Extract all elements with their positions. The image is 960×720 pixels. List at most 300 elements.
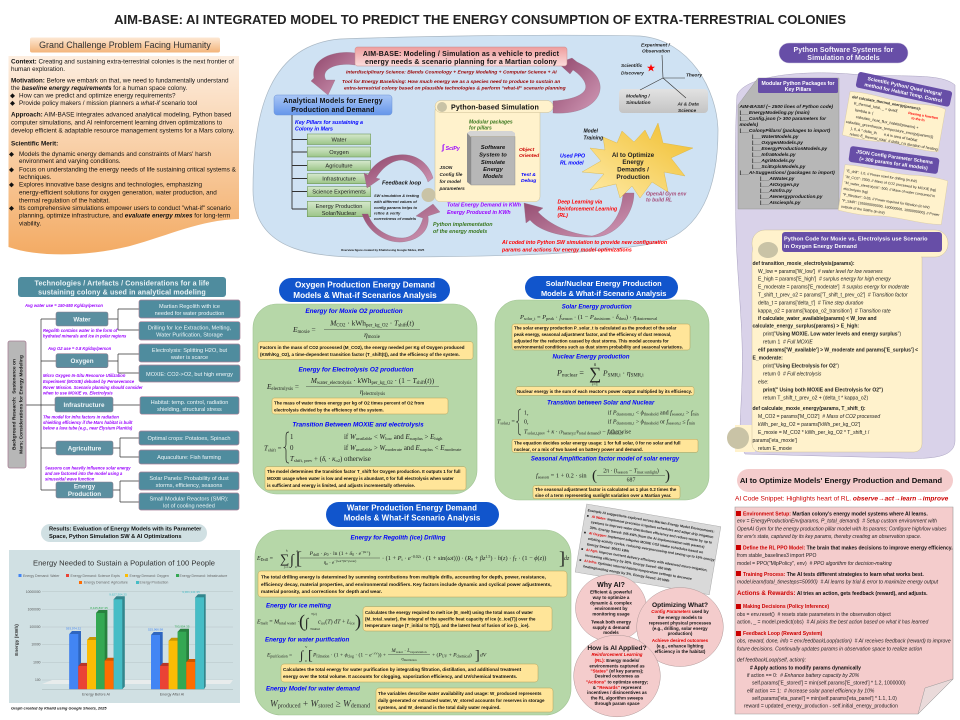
- formula: drilling: k: [286, 548, 288, 552]
- circle: optimizing what: (e.g., enhance lighting: [657, 644, 704, 648]
- file tree: |___InfraModels.py: [752, 152, 796, 158]
- chart legend: Energy Demand: Science Expts: [70, 574, 120, 578]
- formula: seasonal: fseason = 1 + 0.2 · sin: [536, 472, 587, 480]
- label: openai gym: OpenAI Gym env: [646, 192, 688, 198]
- circle: how is AI applied: "Actions" to optimize energy;: [586, 679, 649, 684]
- note: AI suggestions gray card: 30%. Energy Saved: 245 kWh (from the AI implementation with params): [589, 526, 705, 549]
- circle: optimizing what: Config Parameters used by: [651, 609, 709, 614]
- text block: grand challenge body: energy-efficient solutions for oxygen generation, water production, and: [19, 190, 217, 197]
- formula: melt: ∫: [304, 615, 310, 631]
- formula: drilling: j=1: [283, 565, 289, 569]
- node: energy production: [56, 482, 113, 498]
- formula: drilling: · (1 + Pt · e−0.02t · (1 + sin(ωt))) · (R0 + βz1.5) · h(z) · fT · (1 − ϕ(z)): [382, 555, 546, 562]
- numbered code steps: obs, reward, done, info = env.feedbackLoop(action) # AI receives feedback (reward) to improve: [737, 639, 951, 645]
- node: energy production: Energy: [74, 484, 96, 490]
- text block: grand challenge body: ◆: [9, 151, 14, 158]
- label: scipy: ∫ SciPy: [441, 143, 461, 152]
- bar chart: energy needed: [9, 550, 240, 703]
- note: AI suggestions gray card: AI Agri: Improve nutrient delivery efficiency with advanced micro-irrigation,: [586, 548, 708, 572]
- circle: optimizing what: efficiency in the habitat): [655, 649, 706, 654]
- text block: grand challenge body: Focus on understanding the energy needs of life sustaining critical systems &: [19, 167, 237, 174]
- pillar: oxygen: Oxygen: [329, 150, 349, 156]
- code listing: else:: [758, 380, 769, 386]
- node: agriculture: [56, 441, 113, 455]
- formula: seasonal: 2π · (tseason − Tmax sunlight): [603, 468, 659, 475]
- science triangle diagram: Experiment /: [641, 42, 670, 48]
- pillar: agriculture: Agriculture: [325, 164, 353, 170]
- note: AI suggestions gray card: systems to improve water distribution efficiency and reduce waste by up to: [590, 520, 712, 545]
- text block: grand challenge body: Context: Creating and sustaining extra-terrestrial colonies is the next frontier of: [11, 59, 234, 66]
- heading pill: python software: Python Software Systems for: [794, 47, 894, 54]
- title: AIM-BASE: AI INTEGRATED MODEL TO PREDICT THE ENERGY CONSUMPTION OF EXTRA-TERRESTRIAL COLONIES: [114, 12, 846, 27]
- note: seasons: sinusoidal wave function: [45, 476, 95, 482]
- root: background research: Background Research: Sustenance on: [12, 359, 18, 450]
- icon: red star: [647, 64, 655, 71]
- chart legend: Energy Demand: Oxygen: [130, 574, 169, 578]
- note: AI suggestions gray card: ■: [581, 547, 584, 551]
- numbered code steps: Training Process: The AI tests different strategies to learn what works best.: [743, 572, 924, 578]
- label: used PPO: [560, 154, 585, 166]
- title: purification: Energy for water purification: [265, 636, 349, 644]
- note: json config: outputs of the SMRs (in kW): [841, 204, 885, 215]
- leaf: aquaculture: Aquaculture: Fish farming: [157, 455, 221, 461]
- science triangle diagram: Scientific: [621, 63, 643, 69]
- label: test and debug: Debug: [521, 178, 536, 184]
- code listing: E_moderate:: [752, 356, 783, 362]
- circle: how is AI applied: environments captured as: [589, 663, 645, 668]
- panel: solar nuclear: [495, 276, 709, 500]
- pillar: science experiments: Science Experiments: [312, 190, 366, 196]
- panel: central overview blob: [253, 35, 718, 257]
- numbered code steps: elif action == 1: # Increase solar panel efficiency by 10%: [747, 688, 875, 694]
- starburst: AI to optimize: AI to Optimize: [612, 152, 655, 159]
- note: AI suggestions gray card: AI Water: Implement precision irrigation schedules and adapt drip irrigation: [591, 515, 714, 539]
- file tree: |___SciExplsModels.py: [752, 164, 806, 170]
- formula: purification: Mwater · Lvaporization: [391, 649, 427, 654]
- header: AIM-BASE modeling: AIM-BASE: Modeling / Simulation as a vehicle to predict: [363, 51, 560, 58]
- text: key pillars: Key Pillars for sustaining a: [295, 120, 363, 126]
- numbered code steps: Define the RL PPO Model: The brain that makes decisions to improve energy efficiency.: [743, 545, 953, 551]
- numbered code steps: action, _ = model.predict(obs) # AI picks the best action based on what it has learned: [737, 620, 928, 626]
- label: deep learning: (RL): [558, 213, 568, 219]
- text block: grand challenge body: techniques.: [19, 174, 52, 181]
- node: oxygen: [56, 354, 108, 368]
- note: solar: [512, 324, 690, 350]
- circle: how is AI applied: Reinforcement Learning: [591, 652, 643, 657]
- title: transition solar nuclear: Transition between Solar and Nuclear: [547, 401, 655, 407]
- formula: transition: if Wavailable > Wmoderate and Esurplus < Emoderate: [344, 445, 461, 452]
- file tree: |___AIsciexpls.py: [760, 200, 801, 206]
- label: test and debug: [521, 172, 536, 184]
- note: json config: "P_filtration": 0.85, // Power required for filtration (in kW): [842, 193, 930, 210]
- formula: moxie: ηmoxie: [364, 330, 380, 340]
- pillar: energy production: Solar/Nuclear: [322, 211, 356, 217]
- bar value labels: 793,954.35: [174, 624, 190, 628]
- formula: electrolysis: [266, 377, 439, 397]
- text block: grand challenge body: Explores innovative base designs and technologies, emphasizing: [19, 182, 202, 189]
- numbered code steps: [736, 511, 953, 710]
- numbered code steps: from stable_baselines3 import PPO: [737, 553, 816, 559]
- node: water: Water: [73, 316, 91, 324]
- formula: solar nuclear transition: [497, 409, 699, 437]
- text block: grand challenge body: ◆: [10, 100, 15, 107]
- numbered code steps: self.params['E_stored'] = min(self.params['E_stored'] * 1.2, 1000000): [752, 681, 906, 687]
- formula: seasonal: 687: [627, 478, 635, 484]
- label: modular packages: Modular packages: [469, 120, 513, 126]
- note: melt: temperature range (T_initial to T(z)), and the latent heat of fusion of ice (L_ice).: [365, 623, 530, 628]
- numbered code steps: Making Decisions (Policy Inference): [743, 604, 829, 610]
- root: background research: Mars; Considerations for Energy Modeling: [18, 355, 24, 454]
- code listing: T_shift_t_prev_o2 = params['T_shift_t_prev_o2'] # Transition factor: [758, 292, 908, 298]
- text block: interdisciplinary science: [342, 70, 566, 91]
- label: modular packages: for pillars: [469, 126, 492, 132]
- label: openai gym: to build RL: [646, 198, 672, 204]
- pillar: infrastructure: Infrastructure: [322, 177, 356, 183]
- heading pill: AI to optimize models: AI to Optimize Models' Energy Production and Demand: [740, 476, 942, 485]
- code listing: W_low = params['W_low'] # water level for low reserves: [758, 269, 883, 275]
- label: python implementation: Python implementation: [433, 222, 493, 228]
- note: AI suggestions gray card: orbiting activity cycles, reducing overprocessing and saving up to 15% energy: [588, 537, 715, 562]
- text block: grand challenge body: [9, 59, 237, 228]
- leaf: crops: Optimal crops: Potatoes, Spinach: [147, 436, 231, 442]
- circle: how is AI applied: through param space: [594, 701, 640, 706]
- code listing: E_moderate = params['E_moderate'] # surplus energy for moderate: [758, 285, 909, 291]
- formula: purification: Pfiltration · (1 + ϕclog · (1 − e−λV)) +: [312, 651, 386, 659]
- leaf: moxie: [139, 365, 240, 382]
- subheading: AI code snippet: AI Code Snippet: Highlights heart of RL. observe→act→learn→improve: [735, 496, 949, 502]
- numbered code steps: model.learn(total_timesteps=50000) # AI learns by trial & error to maximize energy output: [737, 580, 939, 586]
- leaf: solar panels: storms, efficiency, seasons: [156, 483, 223, 489]
- note: demand: daily generated or extracted water, W_stored accounts for reserves in storage: [378, 698, 545, 703]
- text block: grand challenge body: viability.: [19, 221, 41, 228]
- note: AI suggestions gray card: increasing efficiency by 30%. Energy Saved: 450 kWh: [585, 553, 672, 572]
- feedback note: correctness of models: [374, 216, 417, 221]
- banner: json config: (> 300 params for all models): [859, 156, 928, 172]
- heading pill: python software: [779, 43, 908, 63]
- formula: purification: + (PUV + Pchemical): [432, 651, 472, 659]
- code listing: print("Using MOXIE. Low water levels and energy surplus"): [763, 332, 901, 338]
- numbered code steps: self.params['eta_panel'] = min(self.params['eta_panel'] * 1.1, 1.0): [752, 696, 897, 702]
- feedback note: refine & verify: [374, 210, 401, 216]
- note: melt: (M_total_water), the integral of the specific heat capacity of ice (c_ice(T)) over the: [365, 616, 536, 622]
- formula: drilling: EDrill =: [256, 556, 274, 562]
- feedback note: [374, 193, 420, 221]
- formula: seasonal: [536, 468, 670, 484]
- formula: purification: ]: [475, 648, 480, 664]
- formula: purification: [266, 645, 487, 664]
- label: model training: [584, 128, 603, 142]
- banner: json config: [848, 146, 940, 174]
- note: AI suggestions gray card: ■: [584, 530, 586, 535]
- formula: drilling: d: [296, 549, 298, 553]
- note: regolith: [43, 328, 127, 338]
- formula: nuclear: ∑: [589, 364, 601, 383]
- circle: optimizing what: production): [668, 631, 693, 636]
- box: analytical models: Production and Demand: [291, 107, 375, 114]
- heading pill: oxygen: Oxygen Production Energy Demand: [295, 280, 435, 289]
- label: python implementation: of the energy models: [433, 229, 487, 235]
- file tree: models): [740, 122, 758, 128]
- banner: python code: in Oxygen Energy Demand: [784, 244, 858, 250]
- numbered code steps: env = EnergyProductionEnv(params, P_total_demand) # Setup custom environment with: [737, 518, 937, 524]
- banner: scientific python: method for Habitat Temp. Control: [864, 82, 943, 105]
- formula: solar nuclear transition: 0,: [524, 420, 529, 426]
- formula: nuclear: i=1: [592, 381, 598, 386]
- label: total energy: Energy Produced in KWh: [447, 210, 511, 216]
- label: AI coded: [501, 240, 668, 254]
- y axis labels: 1000000: [28, 607, 41, 611]
- leaf: electrolysis: Electrolysis: Splitting H2O, but: [152, 348, 228, 354]
- note: quad integral code: ), 0, A * delta_th # A is area of habitat: [850, 127, 919, 143]
- chart legend: Energy Demand: Infrastructure: [180, 574, 227, 578]
- heading pill: results: Results: Evaluation of Energy Models with its Parameter: [49, 527, 202, 533]
- label: modular packages: [469, 120, 513, 132]
- heading pill: solar: [525, 276, 678, 299]
- note: json config: "E_drill": 1.0, // Power used for drilling (in kW): [846, 169, 917, 183]
- science triangle diagram: Discovery: [621, 70, 644, 76]
- y axis labels: 10000: [31, 643, 41, 647]
- arrow: AIM-BASE to analytical models: [311, 52, 355, 95]
- arrow: AI back to simulation: [524, 193, 634, 237]
- text block: grand challenge body: develop efficient & adaptable resource management systems for a Mars colony.: [11, 127, 235, 134]
- text block: grand challenge body: Approach: AIM-BASE integrates advanced analytical modeling, Python based: [11, 112, 232, 119]
- code listing: kWh_per_kg_O2 = params['kWh_per_kg_O2']: [758, 422, 861, 428]
- numbered code steps: def feedbackLoop(self, action):: [737, 658, 807, 664]
- heading: modular packages: Modular Python Packages for: [762, 81, 834, 87]
- circle: why AI: environment by: [594, 606, 628, 611]
- note: quad integral code: def calculate_thermal_energy(params):: [852, 95, 921, 111]
- text: key pillars: [295, 120, 363, 132]
- text block: grand challenge body: thermal regulation of the habitat.: [19, 197, 110, 204]
- formula: solar nuclear transition: if Pduststorm,t > ϕthreshold or fseason,t ≤ fmin: [608, 418, 695, 427]
- heading pill: AI to optimize models: [737, 469, 953, 492]
- code listing: params['eta_moxie']: [752, 438, 798, 444]
- file tree: [738, 104, 835, 206]
- heading: technologies: [18, 277, 226, 297]
- formula: solar nuclear transition: if Pduststorm,t < ϕthreshold and fseason,t > fmin: [608, 410, 699, 418]
- circle: how is AI applied: (RL): Energy models/: [595, 658, 640, 663]
- label: object oriented: [519, 147, 540, 159]
- note: quad integral code: E_thermal_total, _ = quad(: [854, 101, 899, 113]
- heading pill: water: Water Production Energy Demand: [347, 504, 477, 513]
- file tree: |___AIWater.py: [760, 176, 795, 182]
- heading: technologies: sustaining colony & used in analytical modeling: [38, 289, 206, 297]
- cube: software system: Models: [483, 174, 504, 180]
- chart legend: Energy Production: [140, 581, 168, 585]
- heading pill: water: Models & What-if Scenario Analysis: [344, 514, 481, 523]
- circle: why AI: Tweak both energy: [591, 620, 631, 624]
- note: electrolysis: [272, 398, 448, 414]
- leaf: solar panels: [139, 472, 239, 490]
- note: json config: [838, 164, 948, 227]
- note: transition: MOXIE usage when water is low and energy is abundant, 0 for full electrolysis when water: [267, 476, 454, 481]
- note: seasonal: The seasonal adjustment factor is calculated as 1 plus 0.2 times the: [535, 487, 677, 492]
- numbered code steps: Environment Setup: Martian colony's energy model systems where AI learns.: [743, 512, 928, 518]
- circle: how is AI applied: the RL algorithm sweeps: [591, 695, 644, 700]
- caption: overview credit: Overview figure created by Khalid using Google Slides, 2025: [341, 248, 425, 252]
- code listing: kappa_o2 = params['kappa_o2_transition'] # Transition rate: [758, 308, 891, 314]
- panel: oxygen production: [253, 278, 477, 494]
- note: solar: adjusted for the reduction caused by dust storms. This model accounts for: [514, 338, 669, 343]
- chart legend: [18, 574, 227, 585]
- note: electrolysis: The mass of water times energy per kg of O2 times percent of O2 from: [274, 400, 424, 406]
- red annotation: [907, 111, 938, 125]
- file tree: |___AIOxygen.py: [760, 182, 799, 188]
- note: purification: energy over the total volume. It accounts for clogging, vaporization efficiency, and UV/chemical treatments.: [283, 674, 517, 679]
- title: solar energy: Solar Energy production: [562, 304, 632, 310]
- note: water use: Avg water use = 150-550 Kg/day/person: [24, 303, 103, 308]
- heading: python simulation: Python-based Simulation: [451, 104, 539, 112]
- formula: demand: Wproduced + Wstored ≥ Wdemand: [270, 700, 370, 710]
- formula: melt: ): [355, 611, 361, 632]
- note: melt: Calculates the energy required to melt ice (E_melt) using the total mass of water: [365, 610, 533, 615]
- file tree: |___ColonyPillars/ (packages to import): [740, 128, 831, 134]
- heading pill: solar: Solar/Nuclear Energy Production: [546, 279, 662, 288]
- pillar: energy production: [307, 201, 371, 217]
- label: total energy: [447, 202, 522, 216]
- document: modular python packages: [738, 78, 839, 209]
- node: energy production: Production: [68, 491, 101, 498]
- circle: optimizing what: Achieve desired outcomes: [652, 638, 709, 643]
- title: nuclear: Nuclear Energy production: [552, 354, 630, 360]
- caption: graph credit: Graph created by Khalid using Google Sheets, 2025: [11, 706, 107, 710]
- title: transition: Transition Between MOXIE and electrolysis: [292, 422, 424, 428]
- formula: purification: [: [308, 648, 313, 664]
- numbered code steps: reward = updated_energy_production - self.initial_energy_production: [744, 704, 898, 710]
- formula: purification: V: [305, 645, 308, 649]
- text block: grand challenge body: planning, optimize infrastructure, and evaluate energy mixes for long-term: [19, 213, 230, 220]
- note: AI suggestions gray card: AI Infra: Optimize internal habitat temperature settings to decrease: [584, 559, 692, 581]
- heading: grand challenge: Grand Challenge Problem Facing Humanity: [39, 40, 211, 50]
- formula: nuclear: [556, 363, 644, 386]
- note: oxygen use: Avg O2 use = 0.8 Kg/day/person: [47, 346, 112, 351]
- note: purification: [281, 664, 538, 682]
- formula: moxie: [292, 318, 420, 340]
- note: json config: "P_SMR": [100000000000, 180000000, 1000000000], // Power: [841, 199, 940, 217]
- formula: transition: Tshift, prev + (δt · κo2): [290, 456, 342, 464]
- heading: modular packages: Key Pillars: [785, 87, 811, 93]
- note: moxie mission: Rover Mission. Scenario planning should consider: [43, 385, 143, 390]
- bar value labels: 9,361,141.35: [182, 590, 200, 594]
- formula: drilling: [: [296, 548, 302, 568]
- note: AI suggestions gray card: ■: [586, 514, 589, 518]
- bars: energy after AI: [151, 594, 206, 689]
- label: openai gym: [646, 192, 688, 204]
- numbered code steps: model = PPO("MlpPolicy", env) # PPO algorithm for decision-making: [737, 561, 892, 567]
- starburst: AI to optimize: Production: [616, 174, 650, 181]
- science triangle diagram: Science: [678, 108, 696, 114]
- circle: why AI: monitoring usage: [592, 612, 630, 616]
- circle: why AI: [576, 574, 646, 642]
- bar value labels: 593,974.32: [66, 626, 81, 630]
- label: deep learning: [558, 200, 618, 219]
- note: moxie: [258, 342, 473, 359]
- x axis labels: [42, 689, 233, 696]
- note: solar: environmental conditions such as dust storm probability and seasonal variations.: [514, 344, 683, 350]
- circle: why AI: dynamic & complex: [590, 600, 632, 606]
- note: json config: electrolysis (kg): [843, 187, 868, 194]
- text block: grand challenge body: ◆: [9, 205, 14, 212]
- note: drilling: The total drilling energy is determined by summing contributions from multiple drills, accounting for depth, power, resistance,: [261, 574, 546, 580]
- note: nuclear: [516, 387, 694, 395]
- note: transition: The model determines the transition factor T_shift for Oxygen production. It outputs 1 for full: [267, 469, 460, 474]
- title: moxie O2: Energy for Moxie O2 production: [305, 308, 403, 315]
- note: infrastructure model: [43, 414, 133, 430]
- leaf: electrolysis: [139, 344, 240, 362]
- node: infrastructure: Infrastructure: [64, 402, 105, 409]
- formula: moxie: MCO2 · kWhper_kg_O2 · Tshift(t): [329, 318, 414, 329]
- y axis labels: 100: [35, 678, 41, 682]
- formula: solar nuclear transition: 1,: [524, 411, 529, 417]
- text block: interdisciplinary science: extra-terrestrial colony based on plausible technologies & perform "what-if" scenario planning: [344, 85, 566, 91]
- title: electrolysis O2: Energy for Electrolysis O2 production: [298, 366, 414, 374]
- leaf: solar panels: Solar Panels: Probability of dust: [149, 476, 229, 482]
- formula: nuclear: PSMR,i · ηSMR,i: [602, 368, 644, 379]
- formula: drilling: ∫: [289, 553, 295, 568]
- formula: transition: 0: [290, 445, 294, 452]
- note: quad integral code: calculate_heat_flux_habitat(params) +: [855, 115, 919, 130]
- code listing: delta_t = params['delta_t'] # Time step duration: [758, 300, 864, 306]
- bars: energy before AI: [69, 596, 125, 689]
- note: regolith: hydrated minerals and ice in polar regions: [43, 334, 127, 338]
- formula: transition: 1: [290, 434, 294, 441]
- note: demand: The variables describe water availability and usage: W_produced represents: [378, 691, 542, 696]
- heading pill: solar: Models & What-if Scenario Analysis: [541, 289, 666, 298]
- node: water: [56, 312, 108, 326]
- formula: transition: if Wavailable < Wlow and Esurplus > Ehigh: [344, 434, 443, 441]
- circle: how is AI applied: incentives / disincentives as: [587, 690, 647, 695]
- cube: software system: System to: [479, 152, 507, 158]
- code listing: return 1 # Full MOXIE: [763, 340, 813, 346]
- starburst: AI to optimize: Demands /: [617, 166, 649, 174]
- note: nuclear: Nuclear energy is the sum of each reactor's power output multiplied by its efficiency.: [517, 389, 692, 394]
- panel: grand challenge: [8, 38, 239, 254]
- code listing: E_moxie = M_CO2 * kWh_per_kg_O2 * T_shift_t /: [758, 430, 870, 436]
- label: total energy: Total Energy Demand in KWh: [447, 202, 522, 208]
- header: AIM-BASE modeling: [355, 47, 567, 66]
- note: moxie mission: [43, 373, 143, 396]
- banner: json config: JSON Config Parameter Schema: [856, 149, 933, 166]
- note: quad integral code: calculate_greenhouse_temperature_energy(params)): [845, 120, 934, 139]
- note: moxie mission: Experiment (MOXIE) debuted by Perseverance: [43, 379, 135, 384]
- formula: melt: T(z): [311, 612, 317, 616]
- note: AI suggestions gray card: AI Oxygen: Implement adaptive MOXIE CO2 intake schedules based on: [589, 531, 704, 554]
- science triangle diagram: Observation: [642, 48, 670, 54]
- note: drilling: material porosity, and corrections for depth and wear.: [261, 589, 382, 595]
- circle: why AI: supply & demand: [593, 625, 630, 630]
- text block: grand challenge body: ◆: [10, 92, 15, 99]
- text block: grand challenge body: Its comprehensive simulations empower users to conduct "what-if" scenario: [19, 205, 231, 212]
- text block: grand challenge body: environment and varying conditions.: [19, 158, 121, 165]
- bar value labels: 8,445,837.35: [90, 606, 108, 610]
- circle: why AI: Efficient & powerful: [590, 590, 632, 594]
- x axis labels: Energy Before AI: [82, 692, 110, 696]
- note: infrastructure model: shielding efficiency if the Mars habitat is built: [43, 420, 133, 425]
- leaf: SMR: [139, 493, 239, 510]
- tree diagram: technologies: [8, 300, 240, 510]
- code listing: print(" Using both MOXIE and Electrolysis for O2"): [763, 388, 883, 394]
- file tree: |___EnergyModeling.py (main): [740, 110, 810, 116]
- note: quad integral code: [842, 91, 946, 153]
- note: solar: The solar energy production P_solar_t is calculated as the product of the solar: [514, 326, 677, 330]
- panel: AI code note: [735, 507, 953, 714]
- text block: grand challenge body: Scientific Merit:: [11, 141, 58, 148]
- label: deep learning: Deep Learning via: [558, 200, 602, 206]
- circle: why AI: Why AI?: [597, 582, 625, 589]
- file tree: |___AIInfra.py: [760, 188, 792, 194]
- note: infrastructure model: The model for Infra factors in radiation: [43, 414, 119, 420]
- bar value labels: 525,966.98: [148, 628, 163, 632]
